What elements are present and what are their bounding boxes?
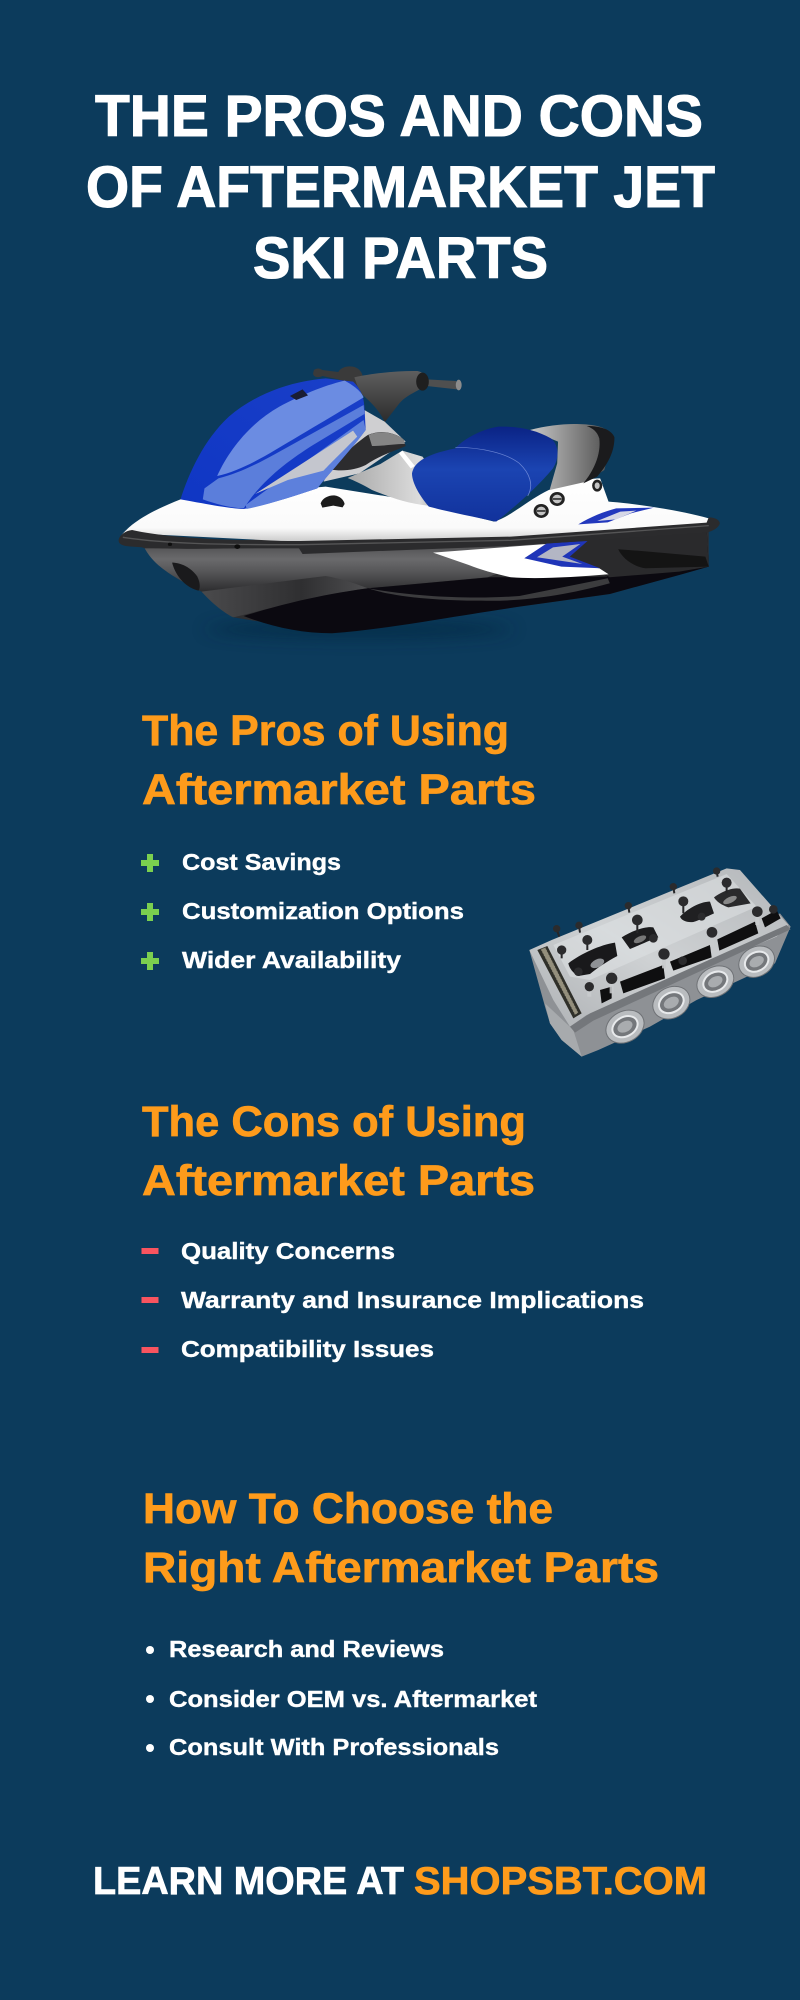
image: engine cylinder head — [529, 867, 791, 1057]
image: jet ski — [119, 366, 720, 639]
rear graphic — [578, 508, 654, 524]
heading: cons: Aftermarket Parts — [142, 1157, 535, 1205]
item: research and reviews: Research and Reviews — [169, 1636, 444, 1662]
list: how to choose — [146, 1636, 537, 1760]
item: wider availability: Wider Availability — [182, 947, 401, 973]
hull backing — [132, 527, 709, 633]
item: warranty and insurance: Warranty and Insurance Implications — [181, 1287, 644, 1313]
timing chain — [537, 946, 582, 1018]
heading: pros: Aftermarket Parts — [142, 766, 536, 814]
heading: how to choose — [143, 1485, 659, 1592]
console grey body — [348, 451, 444, 506]
mirror and steering console — [330, 432, 406, 470]
hull grey — [145, 542, 549, 592]
stern dark panel — [542, 528, 709, 577]
bolts with stalks — [589, 912, 757, 997]
plate highlights — [553, 874, 757, 980]
intake — [172, 563, 200, 591]
inner valve detail — [589, 957, 606, 970]
list: cons — [142, 1238, 644, 1362]
rim shade — [570, 925, 791, 1033]
footer call to action: LEARN MORE AT — [93, 1860, 404, 1903]
item: consult professionals: Consult With Professionals — [169, 1734, 499, 1760]
rub rail — [119, 517, 720, 554]
title: THE PROS AND CONS — [95, 84, 703, 149]
left wall — [545, 1003, 582, 1057]
heading: cons: The Cons of Using — [142, 1098, 526, 1146]
keel fin — [368, 578, 610, 601]
cowl — [180, 378, 366, 509]
far handlebar — [313, 366, 363, 387]
deck vent — [321, 495, 345, 508]
rear seat — [530, 424, 612, 490]
seat supports with cup holders — [534, 480, 602, 518]
deck white — [120, 478, 709, 542]
lower block — [529, 913, 791, 1057]
hull dark underside — [244, 528, 709, 633]
white side graphic — [433, 544, 609, 578]
heading: pros — [142, 707, 536, 814]
title: SKI PARTS — [253, 226, 548, 291]
item: customization options: Customization Options — [182, 898, 464, 924]
exhaust ports — [600, 940, 780, 1050]
title: OF AFTERMARKET JET — [86, 155, 715, 220]
under-cowl grey — [324, 408, 406, 482]
item: compatibility issues: Compatibility Issues — [181, 1336, 434, 1362]
main seat — [412, 427, 557, 522]
list: pros — [141, 849, 464, 973]
footer call to action — [93, 1860, 707, 1903]
dark valve bays — [568, 943, 617, 976]
footer call to action: SHOPSBT.COM — [414, 1860, 707, 1903]
upper plate — [529, 868, 788, 1027]
title — [86, 84, 715, 291]
item: consider oem: Consider OEM vs. Aftermarket — [169, 1686, 537, 1712]
heading: how to choose: Right Aftermarket Parts — [143, 1544, 659, 1592]
heading: pros: The Pros of Using — [142, 707, 509, 755]
heading: cons — [142, 1098, 535, 1205]
dark lower recesses — [620, 965, 665, 993]
handlebar stem and near grip — [354, 371, 428, 422]
item: cost savings: Cost Savings — [182, 849, 341, 875]
heading: how to choose: How To Choose the — [143, 1485, 553, 1533]
hull lower left — [202, 576, 368, 617]
item: quality concerns: Quality Concerns — [181, 1238, 395, 1264]
